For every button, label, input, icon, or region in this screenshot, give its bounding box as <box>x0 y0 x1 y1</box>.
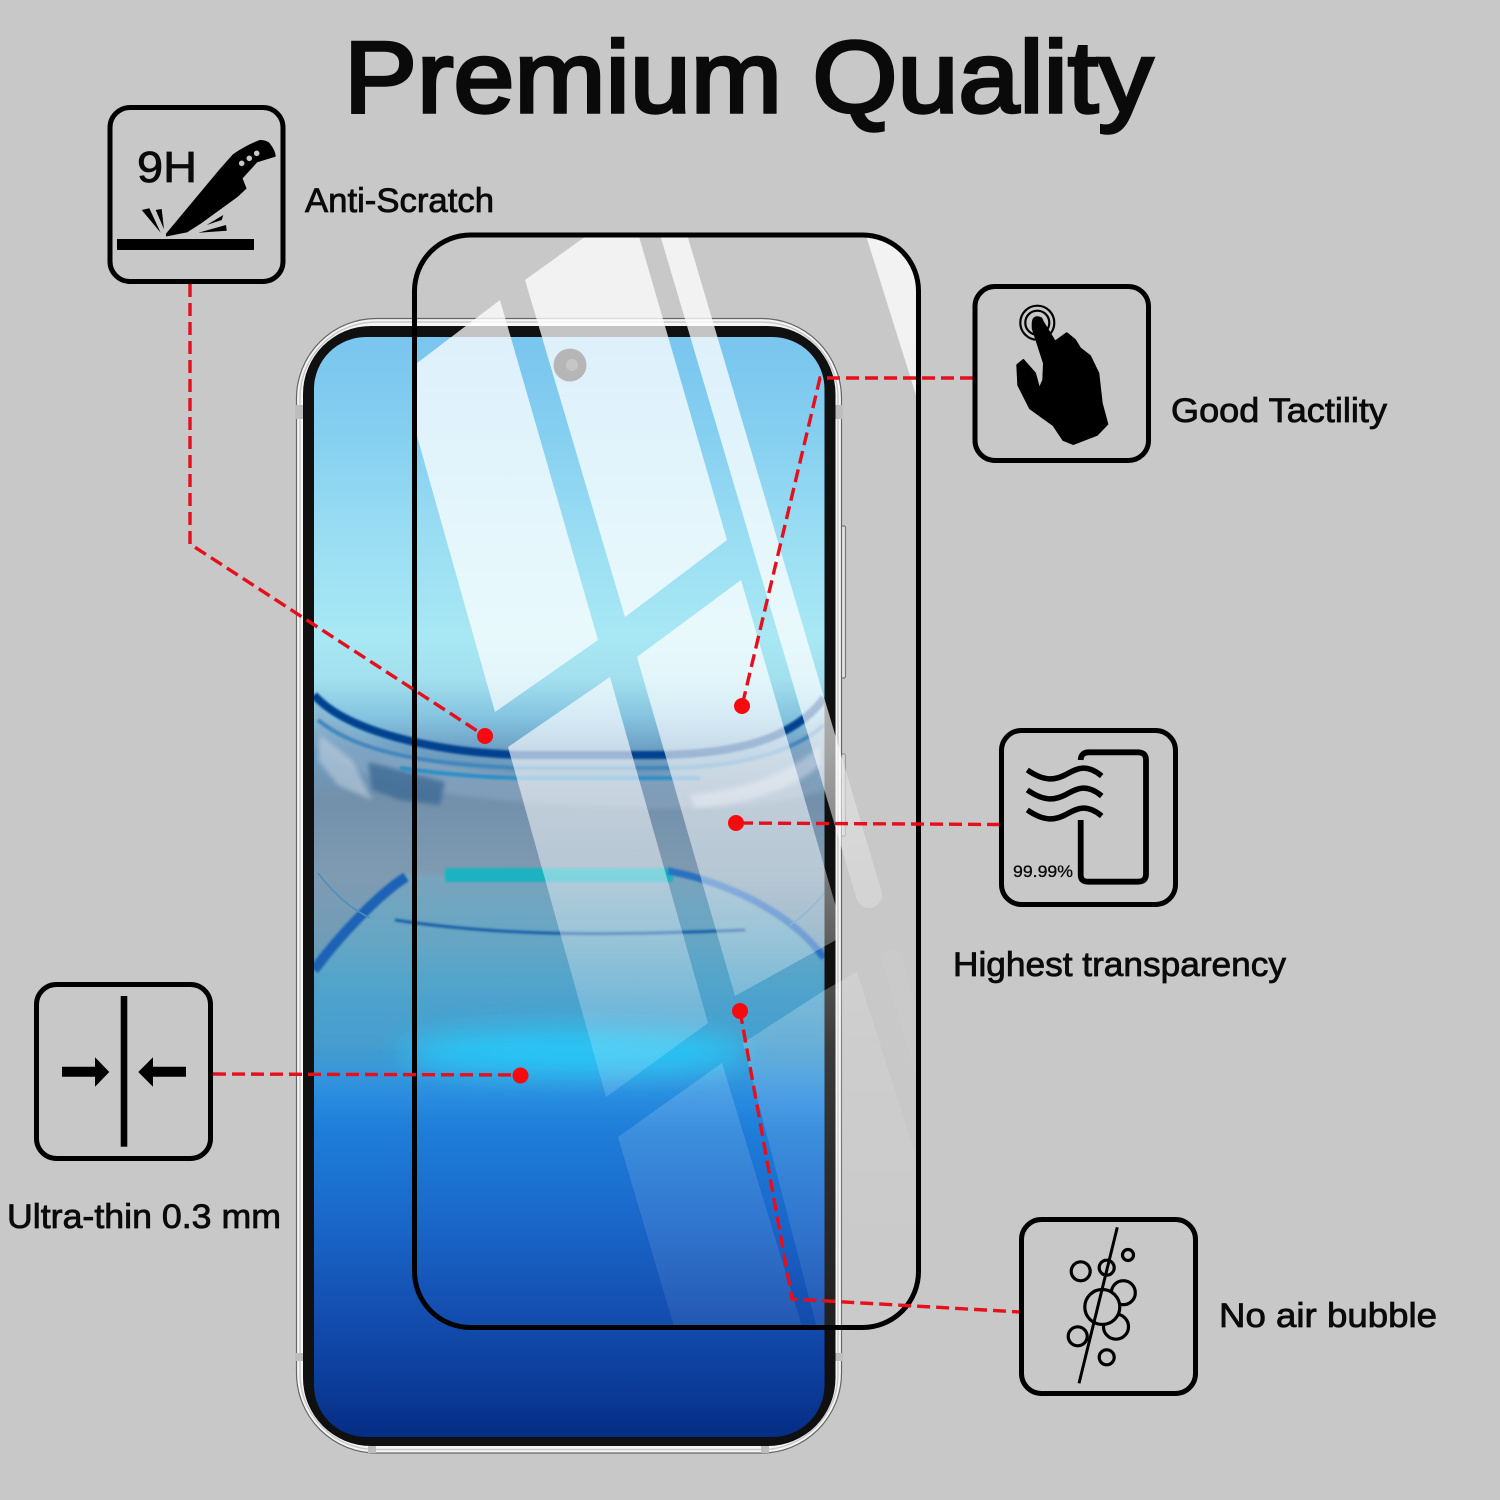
blue rim line <box>318 720 824 768</box>
lower bowl fill <box>314 876 824 1018</box>
label: Ultra-thin 0.3 mm: Ultra-thin 0.3 mm <box>7 1198 281 1236</box>
dark arc <box>314 695 824 755</box>
label: Highest transparency: Highest transparency <box>953 946 1286 984</box>
strip F <box>671 226 869 895</box>
thin arc right <box>790 893 824 925</box>
phone screen <box>314 337 825 1437</box>
phone bezel <box>303 326 836 1446</box>
icon: 9H knife <box>110 108 283 282</box>
lower bowl inner line <box>395 920 745 934</box>
line: anti-scratch <box>190 284 485 736</box>
dark rim patch left <box>368 762 445 805</box>
title: Premium Quality <box>344 22 1154 134</box>
light rim patch left <box>318 735 372 800</box>
line: transparency <box>736 823 1000 824</box>
upper rim shading <box>314 700 824 809</box>
line: bubble <box>740 1011 1020 1312</box>
camera punch hole <box>554 348 586 382</box>
cyan rim line <box>400 768 700 778</box>
phone side buttons <box>841 526 846 836</box>
phone body frame <box>296 318 842 1453</box>
lower bowl arc left <box>314 877 406 970</box>
pane H <box>743 980 842 1325</box>
antenna bands <box>296 405 842 1453</box>
label: No air bubble: No air bubble <box>1219 1297 1437 1335</box>
pane E <box>637 580 836 996</box>
teal lower band <box>445 868 673 882</box>
light rim patch right <box>690 745 820 808</box>
glass protector reflections <box>417 238 916 1325</box>
phone frame inner line <box>300 322 838 1450</box>
icon: transparency phone: 99.99% <box>1013 863 1073 881</box>
line: tactility <box>742 378 973 706</box>
outside reflection dimmer <box>842 753 882 908</box>
icon: 9H knife: 9H <box>137 143 197 192</box>
lower bowl arc right <box>668 871 824 958</box>
callout dots <box>477 698 750 1084</box>
label: Good Tactility: Good Tactility <box>1171 392 1387 430</box>
icon: air bubbles <box>1022 1220 1196 1394</box>
cyan glow <box>400 1028 750 1076</box>
corner pane I <box>866 238 916 395</box>
pane B <box>525 226 727 617</box>
glass protector outline <box>414 235 918 1328</box>
thin arc left <box>318 873 370 918</box>
line: ultra-thin <box>213 1074 520 1075</box>
icon: transparency phone <box>1002 730 1176 904</box>
pane G <box>618 1063 806 1340</box>
strip J <box>892 960 960 1190</box>
icon: touch hand <box>975 286 1148 460</box>
callout lines <box>190 284 1020 1312</box>
icon: ultra-thin arrows <box>36 984 210 1158</box>
phone <box>296 318 846 1453</box>
pane D <box>508 677 708 1097</box>
pane A <box>400 300 598 712</box>
label: Anti-Scratch: Anti-Scratch <box>305 182 494 220</box>
